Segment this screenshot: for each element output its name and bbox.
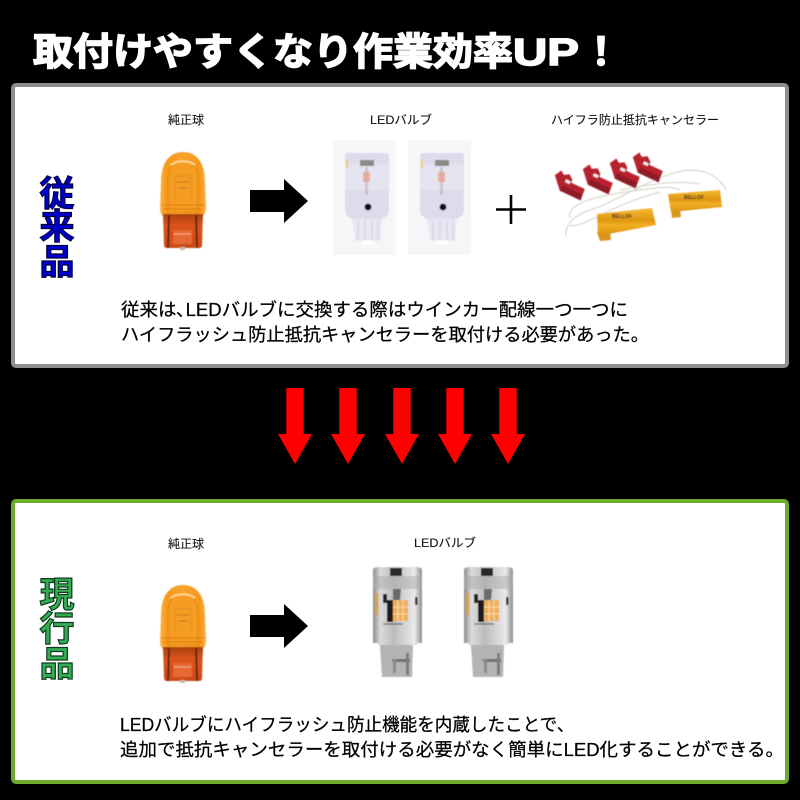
label: conventional: 来: [39, 208, 75, 247]
icon: canceller kit: [550, 151, 726, 241]
icon: silver LED bulb pair: [373, 567, 513, 677]
label: current: [39, 576, 75, 684]
text: conventional explanation: [121, 299, 649, 345]
title: ！: [582, 32, 620, 74]
caption: stock bulb: 純正球: [168, 536, 204, 551]
arrow: to LED: [250, 604, 308, 648]
icon: stock amber bulb: [160, 585, 206, 683]
icon: plus: [496, 195, 526, 224]
label: conventional: 従: [39, 175, 75, 214]
caption: LED bulb: LEDバルブ: [414, 535, 476, 550]
icon: LED bulb pair: [333, 140, 471, 255]
caption: stock bulb: 純正球: [168, 112, 204, 127]
caption: canceller: ハイフラ防止抵抗キャンセラー: [551, 112, 719, 127]
text: conventional explanation: ハイフラッシュ防止抵抗キャンセラーを取付ける必要があった。: [121, 325, 649, 345]
text: conventional explanation: 従来は､LEDバルブに交換する際はウインカー配線一つ一つに: [121, 299, 628, 320]
panel: current: [13, 501, 787, 782]
text: current explanation: [120, 714, 784, 760]
icon: stock amber bulb: [160, 152, 206, 250]
label: conventional: 品: [39, 243, 75, 282]
icon: canceller kit: BELLOF: [684, 195, 704, 201]
caption: LED bulb: LEDバルブ: [370, 112, 432, 127]
label: current: 現: [39, 576, 75, 615]
title: 取付けやすくなり作業効率: [33, 32, 513, 74]
label: conventional: [39, 175, 75, 282]
label: current: 品: [39, 645, 75, 684]
text: current explanation: 追加で抵抗キャンセラーを取付ける必要がなく簡単にLED化することができる。: [120, 740, 784, 760]
panel: conventional: [13, 85, 787, 366]
title: UP: [513, 32, 579, 74]
text: current explanation: LEDバルブにハイフラッシュ防止機能を内蔵したことで､: [120, 714, 566, 735]
label: current: 行: [39, 610, 75, 649]
arrow: to LED: [250, 179, 308, 223]
icon: canceller kit: BELLOF: [612, 214, 632, 220]
arrows: down: [278, 388, 525, 464]
